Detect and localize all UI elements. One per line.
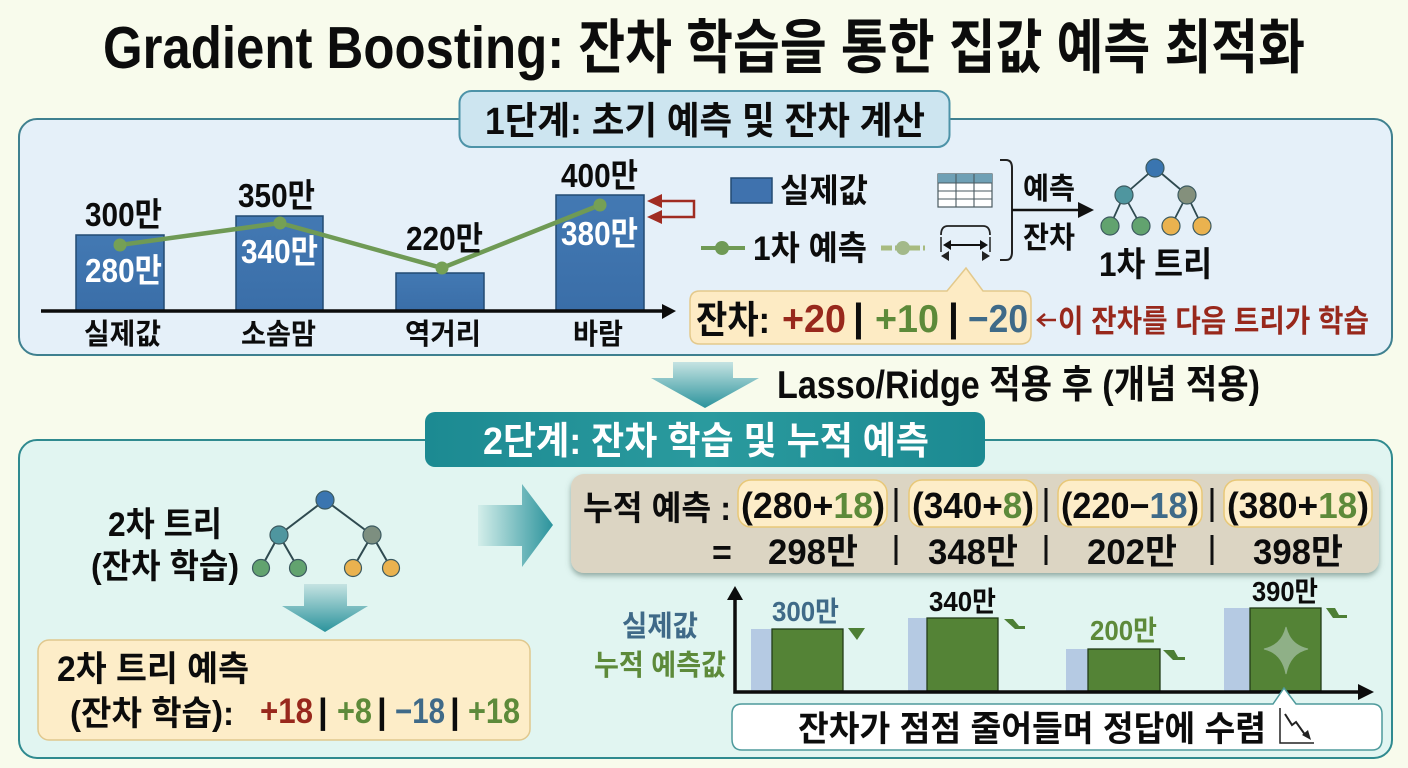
icon: width arrow — [941, 226, 990, 261]
bar chart: actual vs first prediction: 340만 — [241, 233, 318, 270]
second tree label — [91, 506, 239, 586]
panel: second tree prediction: (잔차 학습): — [70, 695, 234, 733]
panel: cumulative prediction: 348만 — [928, 533, 1018, 572]
panel: cumulative prediction — [571, 474, 1379, 573]
panel: second tree prediction: | — [450, 692, 460, 731]
callout: residuals: 잔차: — [696, 300, 770, 342]
bar chart: actual vs first prediction — [41, 157, 676, 351]
panel: second tree prediction: 2차 트리 예측 — [57, 650, 249, 689]
bar chart: actual vs cumulative prediction: 340만 — [929, 586, 996, 617]
bar chart: actual vs first prediction: 역거리 — [405, 318, 481, 351]
panel: cumulative prediction: 202만 — [1087, 533, 1177, 572]
panel: cumulative prediction: 누적 예측 : — [583, 490, 731, 528]
legend — [701, 172, 925, 268]
bar chart: actual vs cumulative prediction: 200만 — [1090, 615, 1157, 646]
callout: residuals: −20 — [968, 298, 1028, 341]
panel: step 2 — [19, 412, 1392, 758]
tree label: 1차 트리 — [1099, 246, 1212, 284]
step 2 heading: 2단계: 잔차 학습 및 누적 예측 — [483, 421, 929, 463]
callout: residuals: +10 — [875, 298, 939, 341]
legend: actual: 실제값 — [622, 610, 698, 643]
bar chart: actual vs first prediction: 350만 — [238, 177, 315, 214]
second tree label: 2차 트리 — [108, 506, 222, 544]
callout: residuals: | — [948, 297, 959, 340]
brace label: residual: 잔차 — [1023, 222, 1075, 255]
arrow: to cumulative prediction — [478, 484, 553, 567]
panel: second tree prediction: +8 — [337, 692, 372, 731]
callout note: 이 잔차를 다음 트리가 학습 — [1058, 304, 1369, 339]
callout: convergence: 잔차가 점점 줄어들며 정답에 수렴 — [798, 710, 1266, 749]
panel: second tree prediction: | — [377, 692, 387, 731]
panel: second tree prediction: +18 — [260, 692, 313, 731]
panel: second tree prediction: −18 — [395, 692, 445, 731]
step 2 heading — [425, 412, 985, 467]
panel: second tree prediction — [38, 640, 530, 740]
bar chart: actual vs first prediction: 400만 — [561, 157, 638, 194]
formula chip 2: (340+8) — [912, 485, 1034, 526]
panel: cumulative prediction: 398만 — [1253, 533, 1343, 572]
callout: convergence — [732, 688, 1382, 750]
bar chart: actual vs first prediction: 바람 — [573, 318, 623, 351]
arrow: tree down to prediction — [282, 584, 368, 632]
second tree label: (잔차 학습) — [91, 548, 239, 586]
panel: second tree prediction: +18 — [468, 692, 520, 731]
bar chart: actual vs first prediction: 소솜맘 — [241, 318, 316, 351]
panel: second tree prediction: | — [318, 692, 328, 731]
bar chart: actual vs first prediction: 실제값 — [84, 318, 161, 351]
formula chip 4: (380+18) — [1227, 485, 1369, 526]
icon: first tree — [1101, 159, 1211, 235]
formula chip 3: (220−18) — [1061, 485, 1199, 526]
icon: data table — [938, 174, 992, 207]
bar chart: actual vs first prediction: 220만 — [406, 220, 483, 257]
icon: second tree — [252, 491, 400, 576]
lasso ridge note: Lasso/Ridge 적용 후 (개념 적용) — [777, 364, 1260, 407]
brace label: prediction: 예측 — [1023, 173, 1075, 206]
callout: residuals: | — [853, 297, 864, 340]
icon: red residual arrows — [647, 194, 694, 224]
arrow: step 1 to step 2 — [651, 362, 759, 408]
bar chart: actual vs cumulative prediction: 300만 — [772, 596, 839, 627]
bar chart: actual vs first prediction: 380만 — [561, 215, 638, 252]
legend: cumulative prediction: 누적 예측값 — [594, 649, 726, 682]
bar chart: actual vs first prediction: 300만 — [85, 196, 162, 233]
panel: cumulative prediction: 298만 — [768, 533, 858, 572]
panel: cumulative prediction: = — [712, 534, 732, 572]
step 1 heading: 1단계: 초기 예측 및 잔차 계산 — [485, 101, 925, 143]
formula chip 1: (280+18) — [741, 485, 885, 526]
callout: residuals — [690, 268, 1031, 344]
icon: brace to tree arrow — [1000, 160, 1094, 260]
bar chart: actual vs cumulative prediction — [727, 576, 1374, 700]
legend: 1차 예측 — [753, 230, 867, 268]
panel: step 1 — [19, 91, 1392, 355]
legend: 실제값 — [780, 172, 868, 209]
callout: residuals: +20 — [782, 298, 846, 341]
bar chart: actual vs first prediction: 280만 — [85, 252, 162, 289]
bar chart: actual vs cumulative prediction: 390만 — [1252, 576, 1318, 607]
icon: falling chart — [1280, 708, 1314, 743]
